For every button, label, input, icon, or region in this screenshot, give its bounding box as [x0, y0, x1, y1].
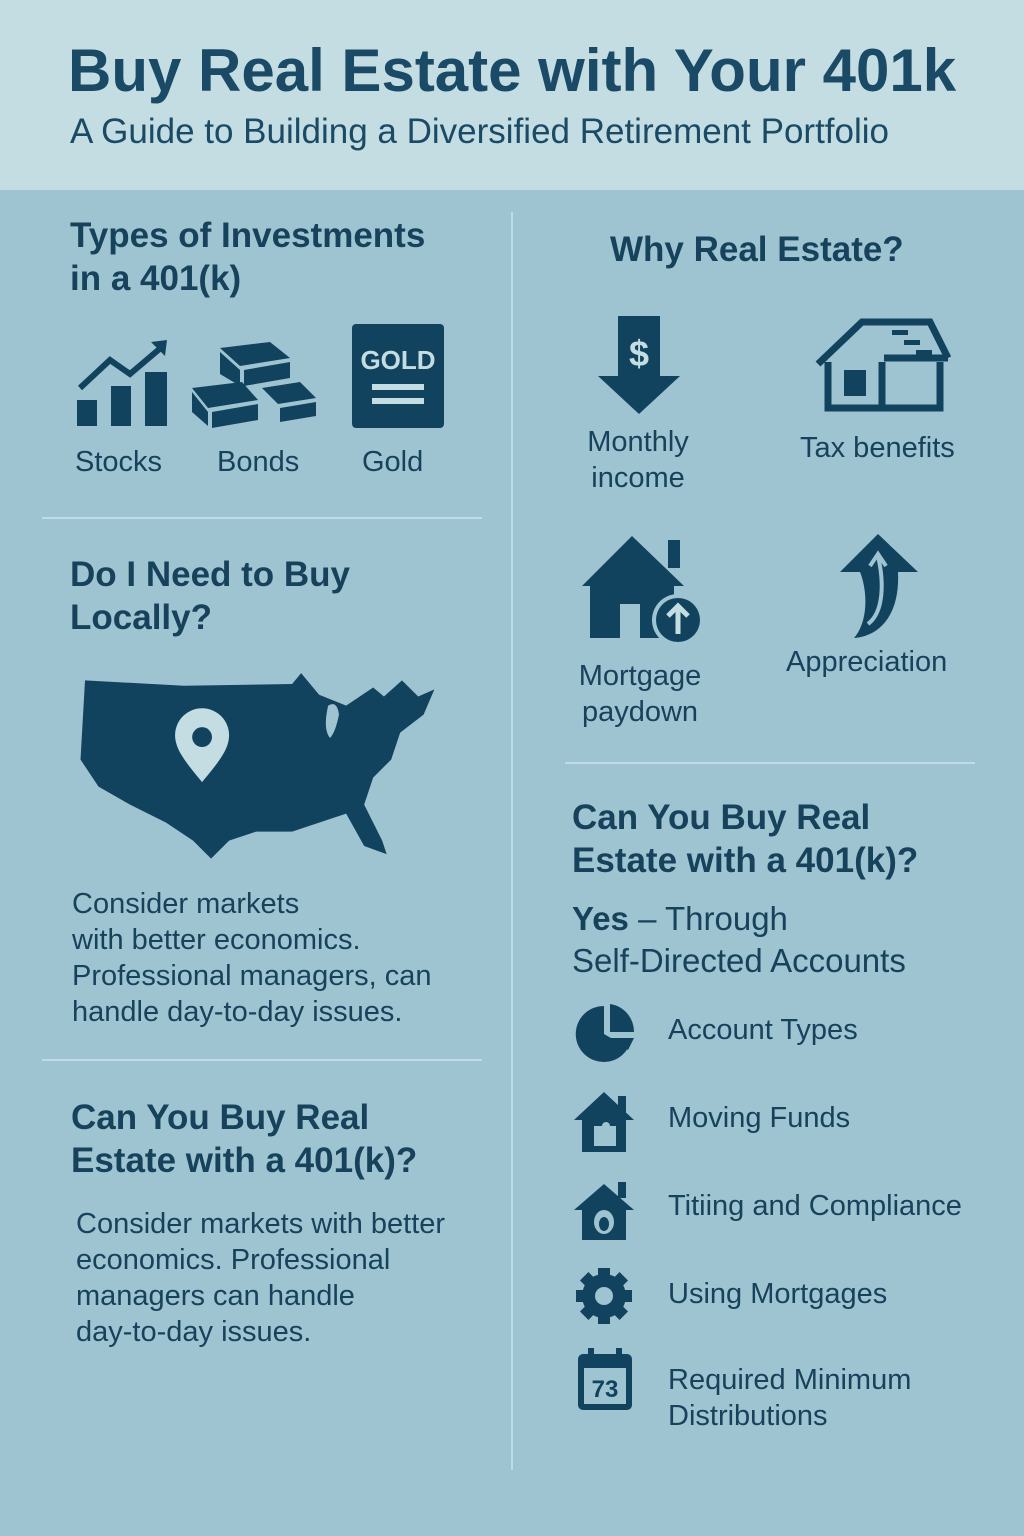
list item: titling [574, 1182, 962, 1240]
icon: us map [80, 673, 434, 859]
panel: why real estate: income [591, 462, 685, 494]
icon: tax benefits [816, 318, 952, 412]
text: Consider markets with better [76, 1208, 445, 1240]
panel: can you buy (right) [572, 798, 962, 1432]
subheading: Self-Directed Accounts [572, 942, 906, 979]
text: handle day-to-day issues. [72, 996, 402, 1028]
heading [572, 798, 918, 880]
icon: bonds [192, 342, 316, 428]
heading [71, 1098, 417, 1180]
text [72, 888, 431, 1028]
panel: why real estate: Tax benefits [800, 432, 955, 464]
panel: types of investments: Gold [362, 446, 423, 478]
heading: Do I Need to Buy [70, 555, 350, 594]
heading: Locally? [70, 598, 212, 637]
icon: mortgage paydown [582, 536, 700, 642]
panel: why real estate [579, 230, 955, 728]
labels: Stocks [75, 446, 162, 478]
heading: in a 401(k) [70, 259, 241, 298]
icon: gold [352, 324, 444, 428]
list item: rmd [578, 1348, 911, 1432]
heading: Estate with a 401(k)? [71, 1141, 417, 1180]
heading: Types of Investments [70, 216, 425, 255]
text: managers can handle [76, 1280, 355, 1312]
panel: why real estate: paydown [582, 696, 698, 728]
text: economics. Professional [76, 1244, 390, 1276]
text: day-to-day issues. [76, 1316, 311, 1348]
text: with better economics. [72, 924, 361, 956]
panel: types of investments: Bonds [217, 446, 299, 478]
text: Consider markets [72, 888, 299, 920]
list item: moving funds [574, 1092, 850, 1152]
text [76, 1208, 445, 1348]
list item: moving funds: Moving Funds [668, 1102, 850, 1134]
list item: rmd: 73 [592, 1376, 618, 1403]
icon: monthly income [598, 316, 680, 414]
text: Professional managers, can [72, 960, 431, 992]
list item: account types [576, 1004, 858, 1062]
subheading [572, 900, 906, 979]
panel: types of investments [70, 216, 444, 478]
panel: why real estate: Appreciation [786, 646, 947, 678]
heading [70, 555, 350, 637]
heading: Why Real Estate? [610, 230, 904, 269]
panel: can you buy (left) [71, 1098, 445, 1348]
list item: account types: Account Types [668, 1014, 858, 1046]
heading: Estate with a 401(k)? [572, 841, 918, 880]
icon: appreciation [840, 534, 918, 638]
panel: why real estate: Monthly [587, 426, 689, 458]
list item: rmd: Required Minimum [668, 1364, 911, 1396]
panel: why real estate: Mortgage [579, 660, 701, 692]
heading: Can You Buy Real [71, 1098, 369, 1137]
list item: mortgages: Using Mortgages [668, 1278, 887, 1310]
header [0, 0, 1024, 190]
list item: rmd: Distributions [668, 1400, 828, 1432]
icon: stocks [77, 340, 167, 426]
subtitle: A Guide to Building a Diversified Retirement Portfolio [70, 112, 889, 151]
subheading: Yes – Through [572, 900, 788, 937]
title: Buy Real Estate with Your 401k [68, 37, 956, 104]
column divider [511, 212, 513, 1470]
list item: titling: Titiing and Compliance [668, 1190, 962, 1222]
icon: monthly income: $ [629, 333, 649, 374]
icon: gold: GOLD [360, 345, 436, 375]
panel: buy locally [70, 555, 434, 1028]
heading [70, 216, 425, 298]
list item: mortgages [576, 1268, 887, 1324]
heading: Can You Buy Real [572, 798, 870, 837]
